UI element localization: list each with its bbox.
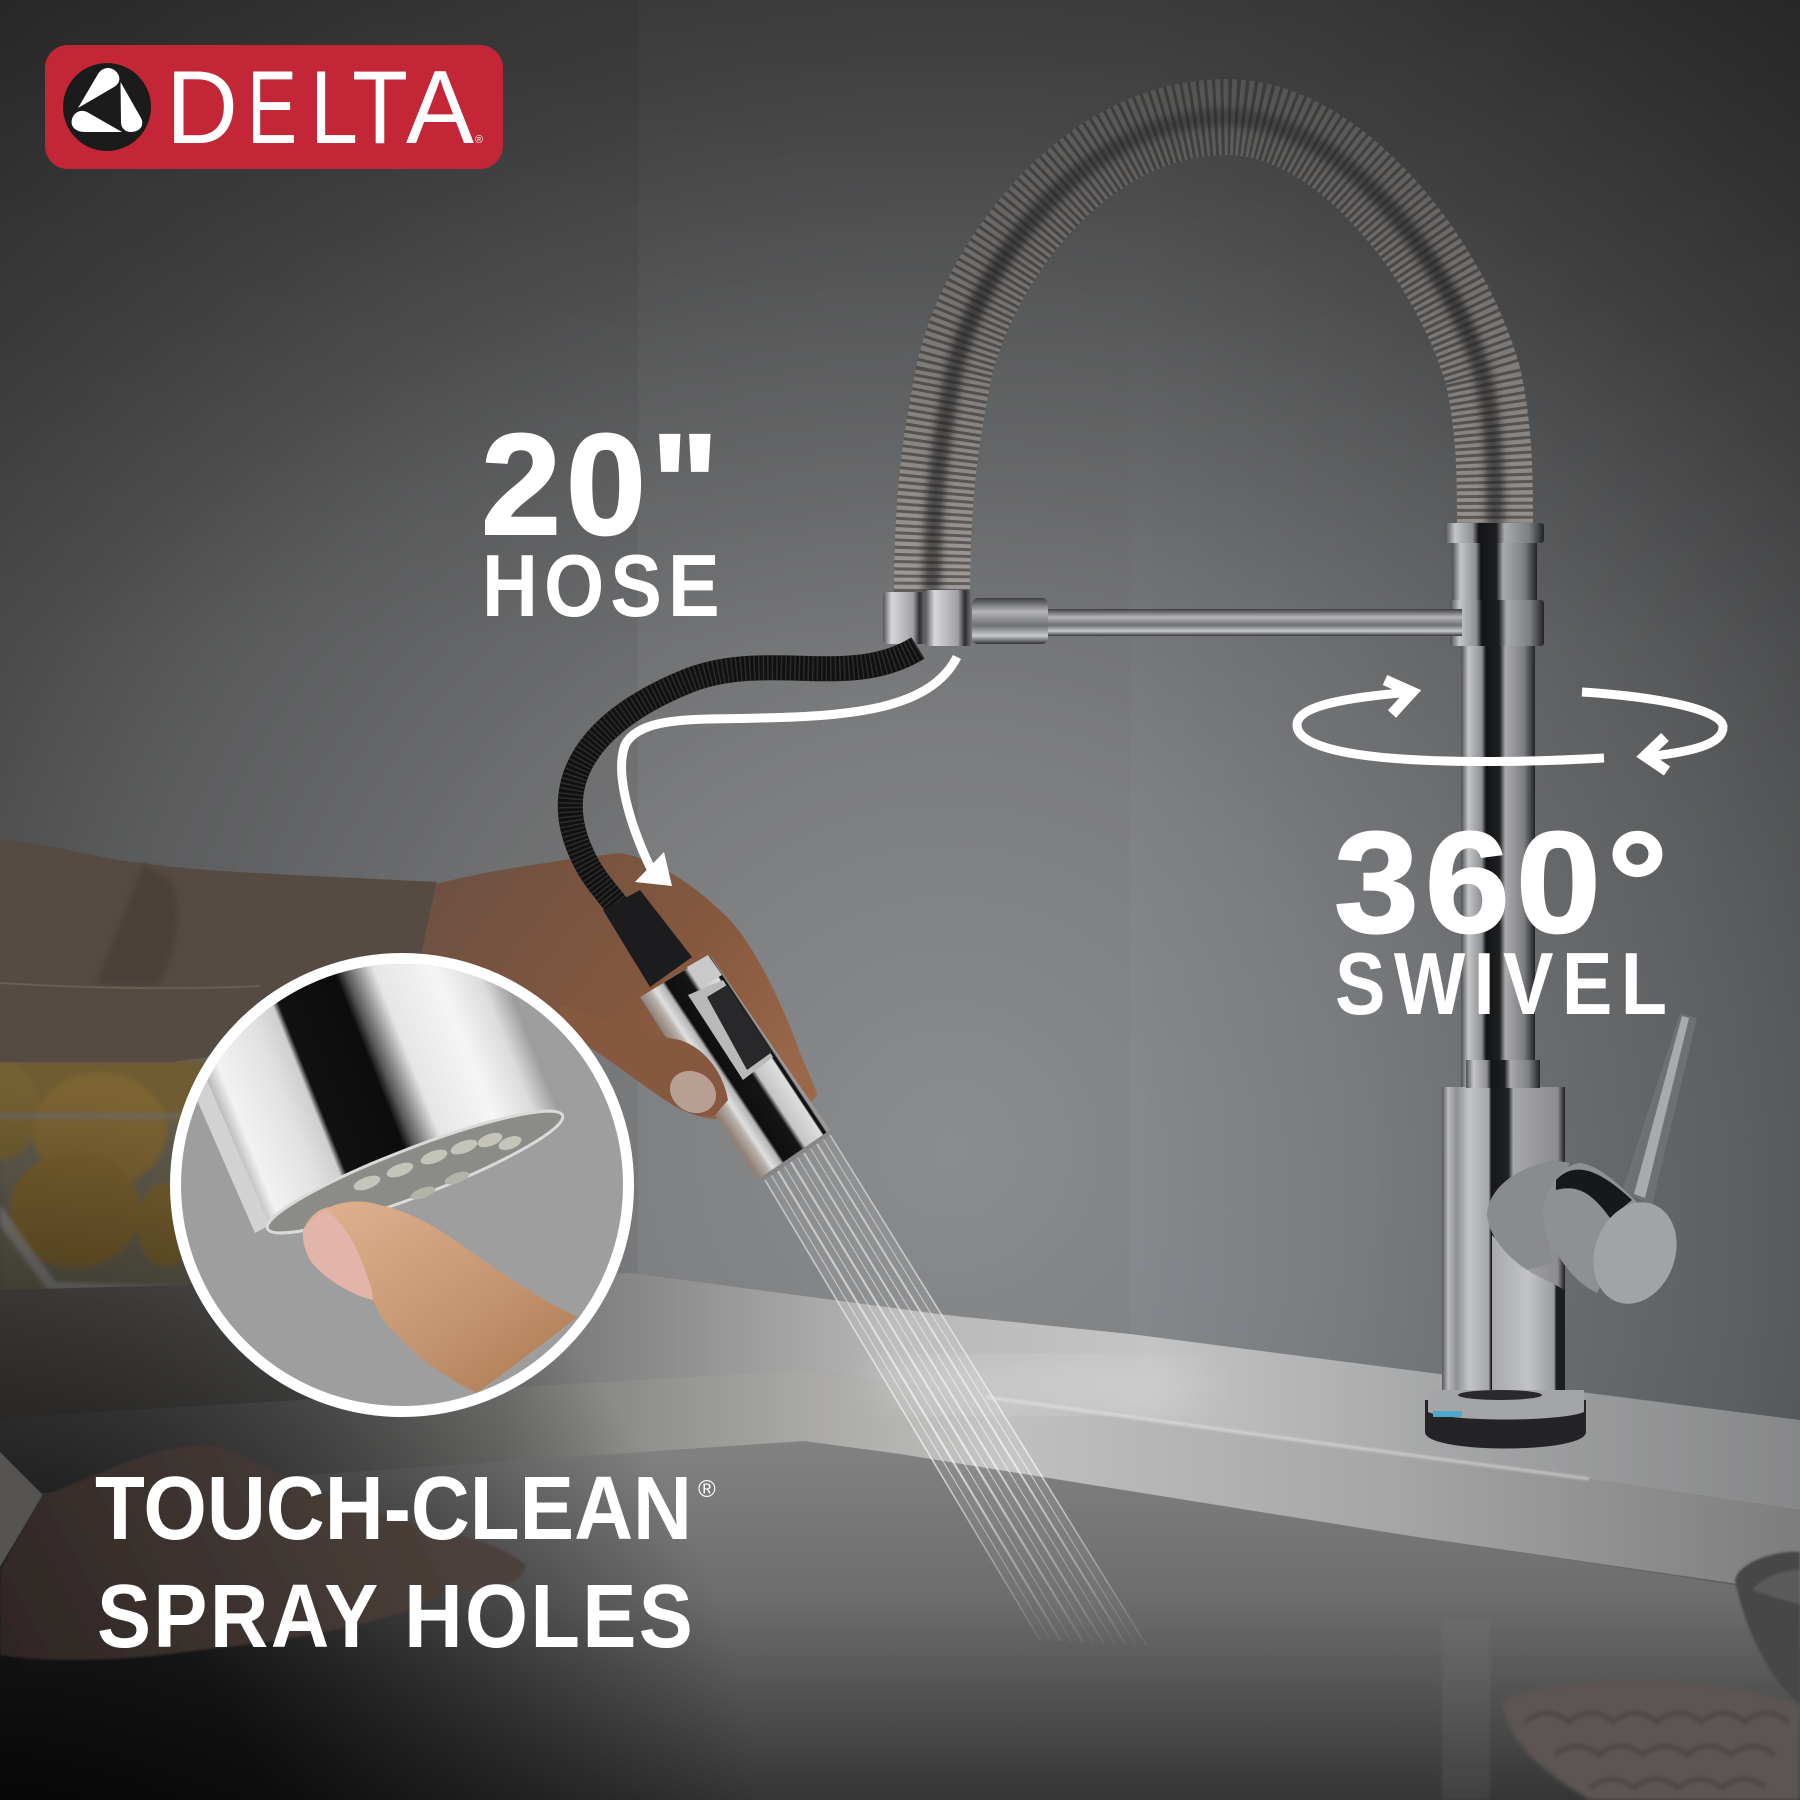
logo wordmark: L	[310, 50, 358, 166]
handle hub	[1487, 1160, 1570, 1270]
handle end cap	[1580, 1190, 1690, 1316]
touch-clean label	[95, 1459, 716, 1667]
bottom right towel	[1503, 1680, 1800, 1800]
button frame	[688, 980, 773, 1080]
lever	[1622, 1013, 1697, 1205]
hose length label	[481, 404, 720, 635]
swivel label	[1334, 803, 1668, 1033]
registered mark: ®	[475, 134, 483, 146]
logo wordmark: A	[406, 50, 475, 166]
faucet	[560, 117, 1697, 1448]
sink basin	[0, 1441, 1800, 1800]
logo wordmark	[166, 50, 475, 166]
spring spout	[932, 117, 1495, 592]
column	[1461, 640, 1535, 1090]
word: swivel: SWIVEL	[1335, 936, 1667, 1033]
logo mark	[63, 63, 151, 151]
base ring	[1425, 1390, 1586, 1448]
logo wordmark: D	[166, 50, 238, 166]
coupler	[972, 598, 1048, 644]
chrome nozzle	[197, 1080, 270, 1233]
registered mark: ®	[698, 1476, 716, 1503]
bowl of lemons	[0, 1058, 260, 1294]
logo wordmark: T	[352, 50, 408, 166]
lower hand in sink	[0, 1445, 525, 1660]
word: hose: HOSE	[482, 536, 720, 635]
logo wordmark: E	[247, 50, 297, 166]
finger	[303, 1201, 578, 1393]
water spray	[765, 1135, 1147, 1646]
countertop and sink	[0, 1090, 1800, 1800]
number: 20 inch: 20"	[481, 404, 719, 565]
handle barrel	[1543, 1163, 1640, 1293]
inset circle: touch-clean spray face	[176, 940, 628, 1412]
spray head connector	[603, 890, 692, 987]
hose dock	[883, 590, 972, 646]
bottom right bowl	[1735, 1552, 1800, 1705]
sleeve	[0, 840, 437, 1062]
counter lip	[0, 1370, 1800, 1595]
black hose	[570, 648, 918, 912]
number: 360 degrees: 360°	[1334, 803, 1668, 963]
arrow: swivel rotation	[1297, 680, 1723, 771]
base body	[1442, 1087, 1565, 1397]
thumb over spray head	[560, 1005, 728, 1121]
spray face	[266, 1110, 564, 1234]
line 1: TOUCH-CLEAN	[95, 1459, 692, 1559]
collar	[1445, 523, 1544, 646]
counter top surface	[0, 1273, 1800, 1510]
spray head	[640, 955, 830, 1180]
horizontal arm	[1048, 609, 1462, 636]
hand holding spray head	[420, 853, 817, 1119]
logo	[45, 45, 503, 169]
fingernail	[303, 1210, 373, 1300]
arrow: along hose	[622, 657, 957, 886]
button	[707, 985, 772, 1070]
line 2: SPRAY HOLES	[97, 1566, 693, 1667]
